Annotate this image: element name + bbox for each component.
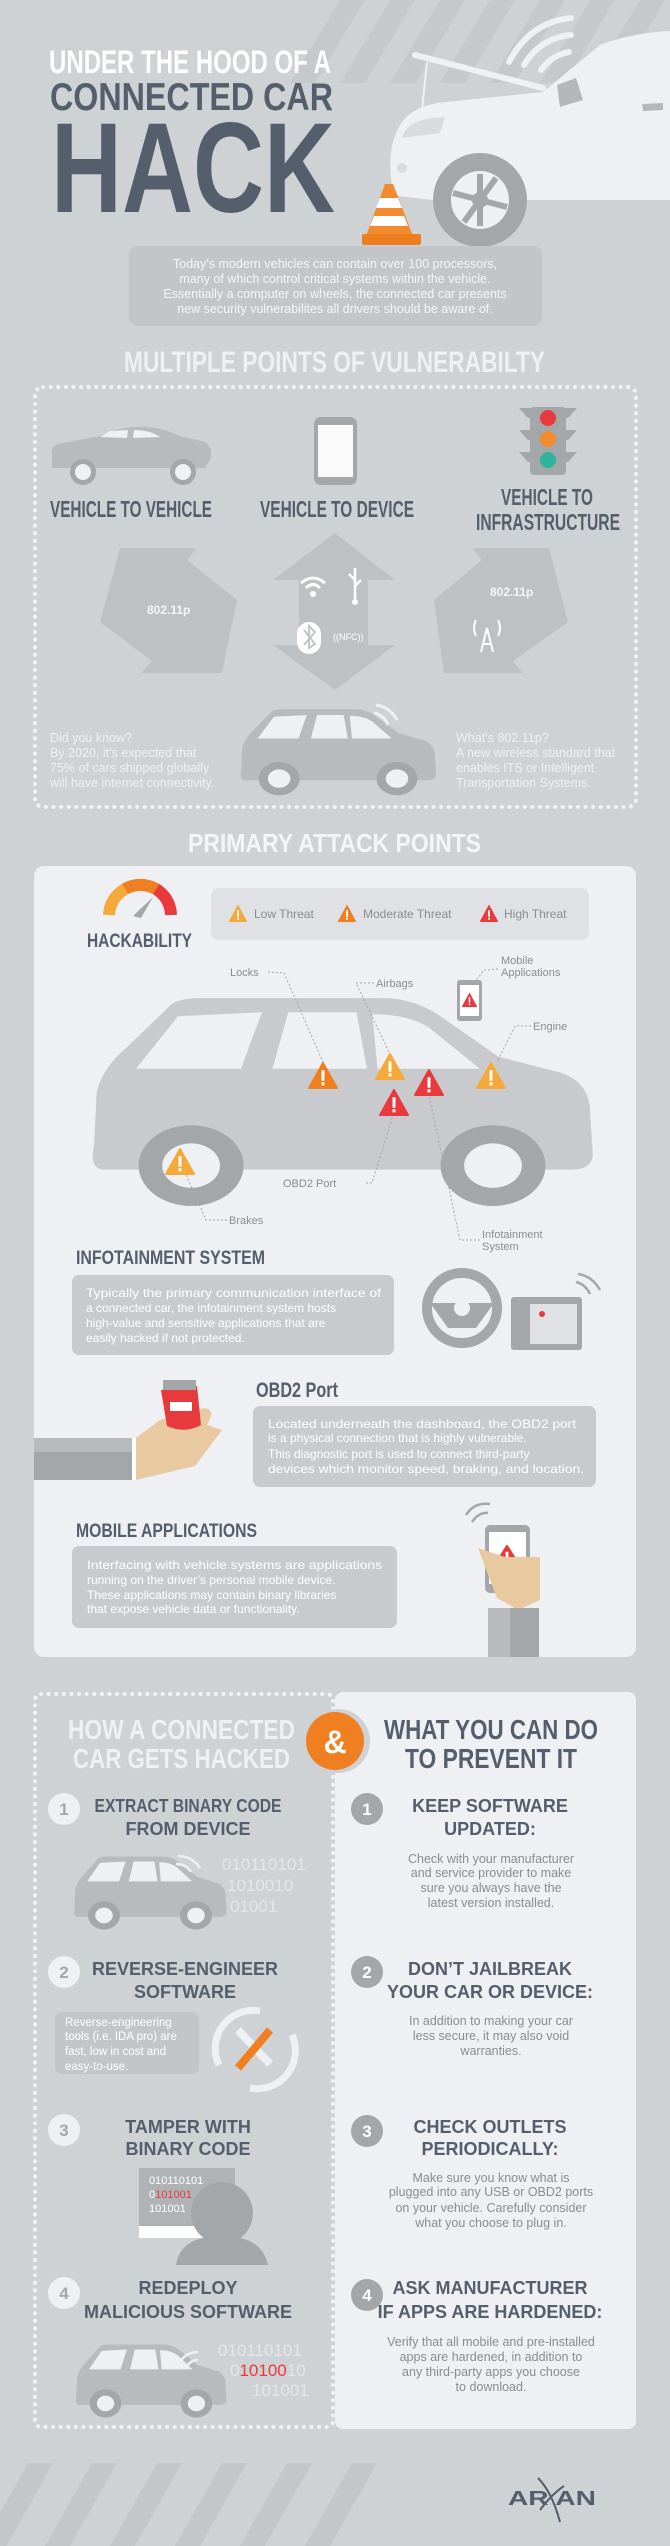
step 3: 010110101	[149, 2175, 203, 2187]
text block: mobile: that expose vehicle data or functionality.	[87, 1602, 300, 1616]
text: what's 802.11p: Transportation Systems.	[456, 776, 591, 790]
text block: mobile	[72, 1546, 397, 1628]
prevent step 3: CHECK OUTLETS	[414, 2117, 566, 2137]
prevent step 4: ASK MANUFACTURER	[392, 2278, 588, 2298]
step 2: fast, low in cost and	[65, 2046, 166, 2058]
text: did you know: will have internet connectivity.	[49, 776, 214, 790]
background stripes bottom	[0, 2463, 377, 2546]
icon: hand with phone	[466, 1504, 540, 1657]
icon: steering wheel and nav screen	[427, 1273, 600, 1350]
prevent step 3: 3	[362, 2122, 372, 2141]
illustration: SUV with attack points: Airbags	[376, 978, 414, 990]
step 2: easy-to-use.	[65, 2061, 128, 2073]
legend: Low Threat	[254, 907, 314, 921]
step 1: 010110101	[222, 1855, 306, 1874]
prevent step 2: warranties.	[459, 2044, 522, 2058]
prevent step 2: DON’T JAILBREAK	[408, 1959, 572, 1979]
prevent step 1: 1	[362, 1800, 372, 1819]
heading: multiple points: MULTIPLE POINTS OF VULNERABILTY	[124, 346, 545, 379]
heading: OBD2 Port: OBD2 Port	[256, 1379, 338, 1402]
panel: how a connected car gets hacked: CAR GETS HACKED	[73, 1743, 290, 1774]
step 1: 01001	[230, 1897, 277, 1916]
icon: hackability gauge	[87, 885, 192, 952]
illustration: SUV with attack points: Engine	[533, 1021, 567, 1033]
arrow: right diagonal	[434, 548, 568, 673]
prevent step 2: 2	[362, 1963, 372, 1982]
icon: traffic cone	[362, 184, 421, 245]
step 1: EXTRACT BINARY CODE	[94, 1796, 282, 1816]
icon: hackability gauge: HACKABILITY	[87, 931, 192, 952]
text block: infotainment: a connected car, the infotainment system hosts	[86, 1301, 336, 1315]
icon: sedan	[52, 427, 211, 485]
panel: vulnerability points	[35, 387, 636, 807]
text block: infotainment: high-value and sensitive applications that are	[86, 1316, 326, 1330]
text: did you know: Did you know?	[50, 731, 132, 745]
prevent step 4: apps are hardened, in addition to	[400, 2350, 582, 2364]
prevent step 1	[351, 1793, 574, 1910]
step 2: tools (i.e. IDA pro) are	[65, 2031, 177, 2043]
heading: primary attack points: PRIMARY ATTACK POINTS	[188, 828, 481, 858]
icon: connected SUV	[241, 705, 436, 795]
title	[49, 44, 335, 240]
legend: Moderate Threat	[363, 907, 452, 921]
prevent step 3: what you choose to plug in.	[414, 2216, 567, 2230]
prevent step 2: In addition to making your car	[409, 2014, 573, 2028]
icon: ampersand circle	[306, 1709, 370, 1773]
intro text block: Today’s modern vehicles can contain over 100 processors,	[173, 257, 497, 271]
intro text block: Essentially a computer on wheels, the connected car presents	[163, 287, 507, 301]
arrow: left diagonal: 802.11p	[147, 603, 190, 617]
step 4: 101001	[252, 2381, 309, 2400]
icon: phone	[314, 417, 357, 485]
text block: infotainment: Typically the primary communication interface of	[86, 1286, 382, 1300]
panel: primary attack points	[34, 866, 636, 1657]
text block: mobile: running on the driver’s personal mobile device.	[87, 1573, 335, 1587]
panel: how a connected car gets hacked: HOW A CONNECTED	[68, 1714, 295, 1745]
title: HACK	[51, 97, 335, 240]
prevent step 4: Verify that all mobile and pre-installed	[387, 2335, 595, 2349]
text block: OBD2: This diagnostic port is used to connect third-party	[268, 1447, 529, 1461]
arrow: left diagonal	[100, 548, 237, 673]
illustration: SUV with attack points: Mobile	[501, 955, 533, 967]
background stripes top	[290, 0, 670, 83]
text block: infotainment: easily hacked if not protected.	[86, 1331, 245, 1345]
step 1: 1	[59, 1800, 69, 1819]
step 2: REVERSE-ENGINEER	[92, 1959, 278, 1979]
heading: infotainment system: INFOTAINMENT SYSTEM	[76, 1248, 265, 1269]
prevent step 4: to download.	[456, 2380, 526, 2394]
illustration: SUV with attack points: OBD2 Port	[283, 1178, 336, 1190]
intro text block: many of which control critical systems within the vehicle.	[179, 272, 491, 286]
text: what's 802.11p	[456, 731, 616, 790]
legend: High Threat	[504, 907, 567, 921]
step 4: MALICIOUS SOFTWARE	[84, 2302, 292, 2322]
prevent step 2	[351, 1956, 593, 2058]
panel: how a connected car gets hacked	[35, 1694, 333, 2427]
legend	[211, 888, 589, 940]
heading: mobile applications: MOBILE APPLICATIONS	[76, 1521, 257, 1542]
text: what's 802.11p: A new wireless standard that	[456, 746, 616, 760]
intro text block	[129, 246, 542, 326]
step 3: TAMPER WITH	[125, 2117, 251, 2137]
label: vehicle to vehicle: VEHICLE TO VEHICLE	[50, 496, 212, 522]
step 3: 101001	[149, 2203, 186, 2215]
step 3: 0101001	[149, 2189, 192, 2201]
arrow: right diagonal: 802.11p	[490, 585, 533, 599]
panel: what you can do	[335, 1692, 636, 2429]
title: CONNECTED CAR	[50, 76, 333, 119]
prevent step 4	[351, 2278, 602, 2394]
panel: what you can do: TO PREVENT IT	[405, 1743, 577, 1774]
step 4: 4	[59, 2284, 69, 2303]
text block: mobile: These applications may contain binary libraries	[87, 1588, 336, 1602]
step 2: Reverse-engineering	[65, 2017, 172, 2029]
label: vehicle to infrastructure	[476, 484, 620, 535]
illustration: SUV with attack points: Brakes	[229, 1215, 264, 1227]
illustration: SUV with attack points	[93, 955, 593, 1253]
text block: OBD2: Located underneath the dashboard, the OBD2 port	[268, 1417, 577, 1431]
step 1: FROM DEVICE	[125, 1819, 251, 1839]
logo: ARXAN	[508, 2478, 596, 2522]
prevent step 1: UPDATED:	[444, 1819, 536, 1839]
text: what's 802.11p: enables ITS or Intelligent	[456, 761, 595, 775]
text: did you know: By 2020, it’s expected that	[50, 746, 197, 760]
intro text block: new security vulnerabilites all drivers should be aware of.	[177, 302, 493, 316]
prevent step 1: KEEP SOFTWARE	[412, 1796, 568, 1816]
prevent step 1: Check with your manufacturer	[408, 1852, 574, 1866]
text block: OBD2: devices which monitor speed, braking, and location.	[268, 1462, 584, 1476]
hero car with open hood	[390, 18, 670, 247]
icon: traffic light	[519, 407, 577, 475]
logo: ARXAN: AR AN	[508, 2488, 596, 2510]
step 3	[48, 2114, 268, 2265]
step 3: BINARY CODE	[125, 2139, 251, 2159]
label: vehicle to device: VEHICLE TO DEVICE	[260, 496, 414, 522]
step 3: 3	[59, 2121, 69, 2140]
prevent step 4: any third-party apps you choose	[402, 2365, 580, 2379]
text block: mobile: Interfacing with vehicle systems are applications	[87, 1558, 382, 1572]
label: vehicle to infrastructure: VEHICLE TO	[501, 484, 593, 510]
prevent step 1: and service provider to make	[411, 1866, 571, 1880]
text: did you know	[49, 731, 214, 790]
prevent step 1: latest version installed.	[428, 1896, 554, 1910]
prevent step 4: 4	[362, 2286, 372, 2305]
illustration: SUV with attack points: System	[482, 1241, 519, 1253]
illustration: SUV with attack points: Locks	[230, 967, 259, 979]
text block: OBD2	[253, 1406, 596, 1487]
text: did you know: 75% of cars shipped globally	[50, 761, 210, 775]
step 4: REDEPLOY	[138, 2278, 238, 2298]
step 2: SOFTWARE	[134, 1982, 236, 2002]
prevent step 3: plugged into any USB or OBD2 ports	[389, 2185, 593, 2199]
prevent step 4: IF APPS ARE HARDENED:	[378, 2302, 602, 2322]
prevent step 2: YOUR CAR OR DEVICE:	[387, 1982, 593, 2002]
prevent step 1: sure you always have the	[420, 1881, 562, 1895]
prevent step 3: on your vehicle. Carefully consider	[395, 2201, 587, 2215]
prevent step 3: PERIODICALLY:	[421, 2139, 559, 2159]
title: UNDER THE HOOD OF A	[49, 44, 331, 80]
text: what's 802.11p: What’s 802.11p?	[456, 731, 549, 745]
step 2: 2	[59, 1963, 69, 1982]
prevent step 3	[351, 2115, 593, 2230]
step 2	[48, 1956, 295, 2089]
prevent step 2: less secure, it may also void	[413, 2029, 569, 2043]
icon: ampersand circle: &	[323, 1724, 347, 1760]
step 4: 01010010	[230, 2361, 306, 2380]
arrow: center vertical with icons	[273, 533, 395, 690]
step 1: 1010010	[227, 1876, 293, 1895]
icon: hand holding OBD2 dongle	[34, 1380, 222, 1480]
text block: OBD2: is a physical connection that is highly vulnerable.	[268, 1431, 527, 1445]
text block: infotainment	[72, 1275, 394, 1355]
step 4: 010110101	[218, 2341, 302, 2360]
step 4	[48, 2277, 309, 2418]
step 1	[48, 1793, 306, 1930]
panel: what you can do: WHAT YOU CAN DO	[384, 1714, 598, 1745]
prevent step 3: Make sure you know what is	[412, 2171, 570, 2185]
illustration: SUV with attack points: Applications	[501, 967, 561, 979]
arrow: center vertical with icons: ((NFC))	[333, 632, 364, 642]
illustration: SUV with attack points: Infotainment	[482, 1229, 543, 1241]
